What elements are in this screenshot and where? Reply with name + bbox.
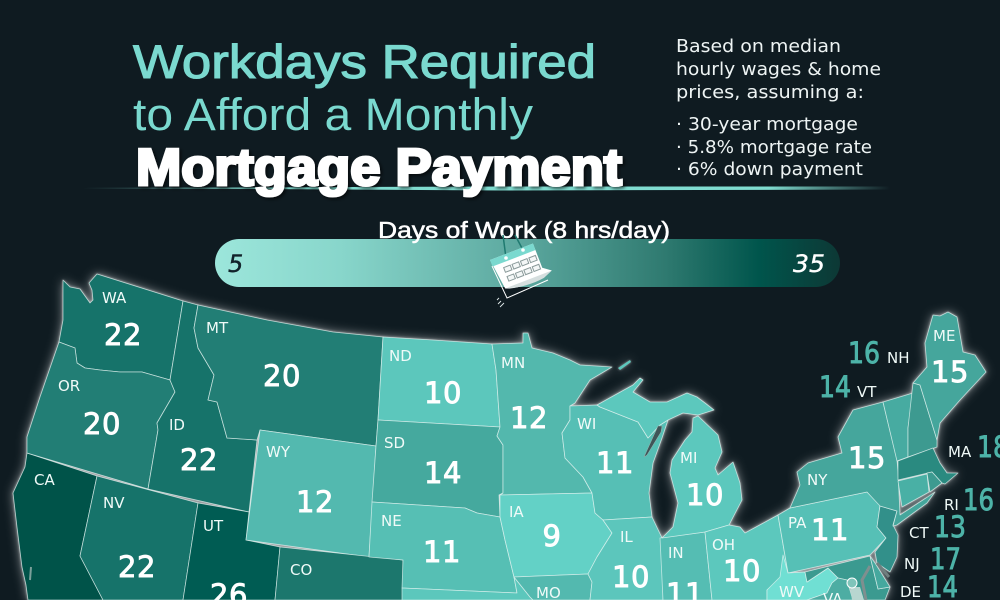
callout: VT xyxy=(819,370,877,404)
state: NH xyxy=(908,383,937,457)
state: SD: 14 xyxy=(424,456,462,490)
state: NV: NV xyxy=(103,494,125,512)
state: UT: UT xyxy=(203,517,224,535)
state: WA: WA xyxy=(102,289,127,307)
Long Island Sound xyxy=(900,492,935,513)
state: ND xyxy=(378,337,500,427)
state: DE xyxy=(870,556,890,589)
state: MD xyxy=(805,556,890,600)
state: NE: NE xyxy=(381,512,402,530)
state: MI: MI xyxy=(680,449,697,467)
state: ID: ID xyxy=(169,416,185,434)
state: ND: ND xyxy=(389,347,412,365)
state: IL: IL xyxy=(620,528,633,546)
state: RI xyxy=(927,472,942,492)
callout: NH xyxy=(848,336,910,370)
map of states xyxy=(13,274,986,600)
island: Isle Royale xyxy=(618,360,631,370)
state: WI: 11 xyxy=(596,446,634,480)
state: WV xyxy=(767,555,838,600)
state: MN: MN xyxy=(501,354,525,372)
state: WA xyxy=(59,274,183,380)
title line: Mortgage Payment: Mortgage Payment xyxy=(136,139,622,197)
state: WI: WI xyxy=(577,415,596,433)
callout: NJ: 17 xyxy=(930,542,961,576)
callout: VT: VT xyxy=(857,383,877,401)
methodology note: · 30-year mortgage xyxy=(676,114,858,135)
legend gradient bar xyxy=(215,239,840,287)
state: NV: 22 xyxy=(118,550,156,584)
methodology note: · 5.8% mortgage rate xyxy=(676,137,872,158)
state: CA: CA xyxy=(34,471,55,489)
state: CT xyxy=(898,474,929,507)
state: IN xyxy=(660,532,712,600)
Green Bay xyxy=(644,426,662,457)
state: OH: OH xyxy=(712,536,735,554)
state: OH: 10 xyxy=(723,554,761,588)
state: MN: 12 xyxy=(510,401,548,435)
state: WY xyxy=(246,430,376,557)
state: MN xyxy=(492,333,612,495)
state: IA: 9 xyxy=(542,519,562,553)
state: WI xyxy=(562,405,668,520)
San Francisco Bay detail xyxy=(30,567,31,580)
methodology note xyxy=(676,36,881,180)
state: PA: 11 xyxy=(811,513,849,547)
icon: calendar xyxy=(490,235,554,307)
state: OR xyxy=(27,342,175,489)
callout: MA xyxy=(948,430,1000,464)
state: NY: NY xyxy=(807,471,828,489)
state: NE xyxy=(369,502,517,593)
state: NY: 15 xyxy=(848,441,886,475)
state: WY: WY xyxy=(266,443,291,461)
state: ME xyxy=(913,312,986,440)
state: OR: OR xyxy=(58,377,80,395)
callout: RI: RI xyxy=(944,496,959,514)
legend minimum: 5 xyxy=(228,250,243,278)
state: MT: MT xyxy=(206,319,229,337)
methodology note: · 6% down payment xyxy=(676,159,863,180)
state: IA xyxy=(500,493,612,577)
state: SD: SD xyxy=(384,434,405,452)
methodology note: hourly wages & home xyxy=(676,59,881,80)
state: NY xyxy=(790,402,935,526)
methodology note: prices, assuming a: xyxy=(676,82,864,103)
state: MT: 20 xyxy=(263,359,301,393)
state: CA xyxy=(13,453,103,600)
callout: MA: MA xyxy=(948,443,972,461)
title rule xyxy=(82,186,890,190)
state: VT xyxy=(883,393,913,461)
legend maximum: 35 xyxy=(793,250,825,278)
state: OR: 20 xyxy=(83,407,121,441)
methodology note: Based on median xyxy=(676,36,841,57)
state: PA xyxy=(778,492,886,573)
callout: NJ: NJ xyxy=(904,555,920,573)
callout: NH: NH xyxy=(887,349,910,367)
state: IL xyxy=(588,517,663,600)
callout: NJ xyxy=(904,542,961,576)
state: SD xyxy=(372,420,503,517)
state: MO xyxy=(514,574,592,600)
Chesapeake Bay and DC marker xyxy=(847,563,889,600)
state: ME: 15 xyxy=(931,355,969,389)
state: MA xyxy=(898,448,958,484)
state: WY: 12 xyxy=(296,485,334,519)
state: KS xyxy=(402,577,533,600)
state: UT xyxy=(183,503,280,600)
state: NE: 11 xyxy=(423,535,461,569)
callout: CT: 13 xyxy=(934,510,966,544)
state: CO xyxy=(275,547,403,600)
callout: NH: 16 xyxy=(848,336,880,370)
state: OH xyxy=(705,515,788,600)
title line: to Afford a Monthly: to Afford a Monthly xyxy=(133,89,534,140)
state: WA: 22 xyxy=(104,318,142,352)
state: MI xyxy=(597,378,742,538)
state: IN: IN xyxy=(668,544,684,562)
state: NV xyxy=(80,476,198,600)
callout: CT: CT xyxy=(909,524,929,542)
legend heading: Days of Work (8 hrs/day) xyxy=(378,217,670,243)
state: VA xyxy=(807,578,860,600)
state: ND: 10 xyxy=(424,376,462,410)
callout: VT: 14 xyxy=(819,370,851,404)
state: IL: 10 xyxy=(612,560,650,594)
state: ID xyxy=(148,301,257,512)
state: IA: IA xyxy=(509,503,524,521)
callout: RI xyxy=(944,483,994,517)
state: ID: 22 xyxy=(180,443,218,477)
state: MI: 10 xyxy=(686,478,724,512)
state: MT xyxy=(194,305,383,446)
callout: DE xyxy=(900,570,958,600)
title xyxy=(82,35,890,197)
state: NJ xyxy=(875,506,898,572)
callout: RI: 16 xyxy=(963,483,994,517)
legend: days of work xyxy=(215,217,840,307)
state: CO: CO xyxy=(290,561,312,579)
state: ME: ME xyxy=(933,327,955,345)
callout: CT xyxy=(909,510,966,544)
state: PA: PA xyxy=(788,514,807,532)
title line: Workdays Required: Workdays Required xyxy=(133,35,596,88)
